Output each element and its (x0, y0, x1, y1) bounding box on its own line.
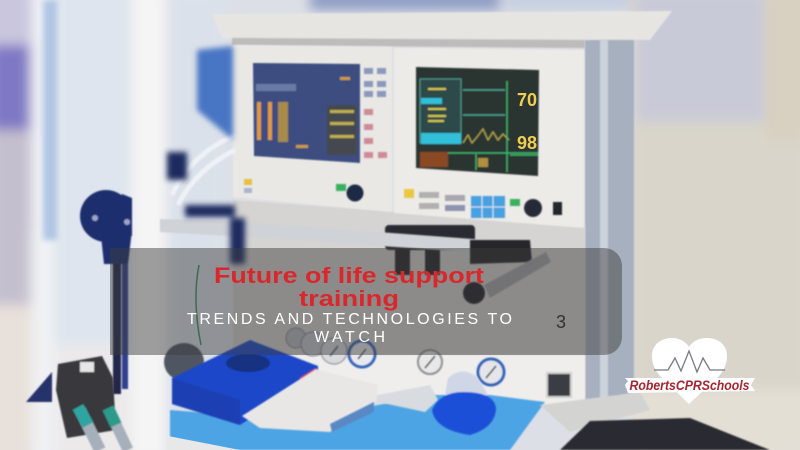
icon: heartbeat line (654, 351, 725, 372)
blue bellows column (197, 46, 233, 140)
title: training (299, 286, 399, 311)
horizontal rail (160, 219, 500, 254)
hoses at left of machine (172, 135, 235, 205)
left monitor screen (253, 63, 360, 163)
dark handle bracket (385, 225, 475, 275)
left monitor housing (233, 45, 392, 212)
logo: RobertsCPRSchools heart (625, 338, 755, 404)
cart edge (540, 392, 650, 432)
laryngoscope tray (378, 385, 438, 412)
translucent title band (110, 248, 622, 355)
shelf shadow (232, 38, 585, 48)
machine lower body (233, 200, 585, 410)
machine side panel (585, 36, 634, 410)
subtitle: WATCH (314, 329, 385, 346)
tissue box (172, 340, 318, 425)
top shelf (212, 11, 672, 40)
pad clip (330, 402, 374, 432)
subtitle: TRENDS AND TECHNOLOGIES TO (187, 311, 512, 328)
title (214, 263, 485, 311)
green tube (196, 265, 201, 345)
logo text: RobertsCPRSchools (630, 378, 750, 393)
grey canister (164, 343, 204, 381)
right monitor screen (416, 67, 539, 176)
white tray edge (168, 436, 240, 450)
ribbon (625, 378, 755, 393)
angled handle (463, 240, 551, 304)
monitor readout 70: 70 (517, 90, 537, 110)
control knobs and keypads (244, 179, 562, 218)
blue drape on cart (170, 395, 545, 450)
left monitor buttons (364, 68, 387, 158)
dark fittings by rail (167, 152, 245, 264)
subtitle (187, 311, 512, 346)
monitor readout 98: 98 (517, 133, 537, 153)
title: Future of life support (214, 263, 485, 288)
right monitor housing (394, 48, 584, 228)
icon: heart (652, 338, 727, 404)
anesthesia machine (160, 11, 672, 410)
power socket (547, 373, 571, 397)
connector block with tubes (56, 356, 128, 450)
white folded pad (242, 369, 378, 432)
pressure gauges (286, 328, 504, 385)
blue mask (432, 372, 496, 435)
panel number 3: 3 (556, 312, 566, 332)
hanging arm with knob (80, 190, 132, 394)
dark corner object (560, 418, 770, 450)
